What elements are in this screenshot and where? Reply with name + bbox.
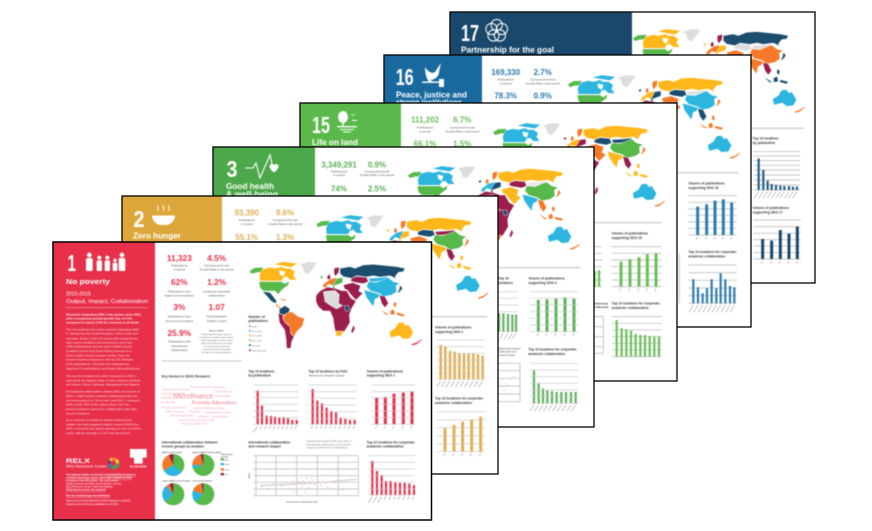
legend: income groups [221,453,232,476]
word cloud: key themes in SDG1 research: Cash Transfer [165,410,184,414]
stats: SDG 1 key numbers: Growth Rate in the period [200,268,234,272]
icon: family of people [86,253,125,271]
text block: about the analysis [66,474,136,506]
chart: top 10 locations by FWCI [308,369,357,429]
logo: Elsevier tree: ELSEVIER [130,466,147,469]
stats: SDG 1 key numbers: 4.5% [207,253,227,263]
text block: key findings: SDG 1 research was above average for four out of the [66,427,141,431]
chart: international collaboration and research impact scatter: International collaboration [248,441,290,445]
legend: number of publications: publications [248,319,268,323]
stats: SDG 1 key numbers: high-income locations [165,294,194,298]
stats: SDG 16 [491,68,560,101]
text block: key findings: income locations featured in the top 50: Ethiopia [66,358,133,362]
legend: income groups: Lower [225,469,230,471]
chart: top 10 corporate-academic collaboration SDG 15: Top 10 locations for corporate- [612,302,660,306]
word cloud: key themes in SDG1 research: Economic Growth [162,391,186,395]
icon: SDG colour wheel [109,459,118,468]
stats: SDG 15: Growth Rate in the period [445,130,480,134]
chart: top 10 locations by publication: by publication [753,141,775,145]
word cloud: key themes in SDG1 research: Poverty [190,410,201,414]
stats: SDG 1 key numbers: collaboration [171,348,188,352]
text block: about the analysis: in support of the UN's SDGs. This 2019 update [66,480,119,483]
word cloud: key themes in SDG1 research: Rural Poverty [215,389,234,393]
word cloud: key themes in SDG1 research: Rural Households [170,414,194,418]
chart: top 10 corporate-academic collaboration SDG 15 [612,302,662,357]
word cloud: key themes in SDG1 research: Poor People Development [190,385,225,389]
sheet: SDG 16 peace, justice and strong institutions [384,55,751,327]
panel: SDG 16 header: 16 [396,64,414,90]
stats: SDG 16: Compound Annual [530,78,555,82]
word cloud: key themes in SDG1 research: Rural Areas [215,394,231,398]
panel: SDG 3 header [213,147,315,427]
word cloud: key themes in SDG1 research: Households Income [163,387,189,391]
chart: top 10 locations by publication: by publication [248,374,271,378]
chart: volume of publications SDG 16 [688,182,737,240]
text block: about the analysis: Data sourced and analysed by SciVal, Elsevier's research [66,500,131,503]
text block: about the analysis: SDG Resource Centre. Data and analysis [66,486,113,489]
note: what is FWCI: an indicator of citation impact where [199,336,235,339]
chart: top 10 corporate-academic collaboration SDG 3: Top 10 locations for corporate- [528,348,577,352]
stats: SDG 3: in period [333,173,345,177]
word cloud: key themes in SDG1 research: Poverty Alleviation [192,400,237,406]
legend: number of publications: Number of [248,315,266,319]
chart: top 10 locations by publication [753,137,800,198]
stats: SDG 1 key numbers: Citation Impact [207,319,227,323]
chart: top 10 corporate-academic collaboration SDG 16 [688,250,737,312]
legend: income groups: locations [221,455,229,458]
pie charts: international collaboration between income groups: International collaboration between [162,440,218,444]
legend: number of publications: 751 to 1k [251,344,261,347]
map: SDG 17 publications [633,29,805,116]
note: what is FWCI: above 1.00 indicate the research [201,342,233,345]
pie: low income [192,483,214,505]
legend: number of publications: 101 to 250 [251,330,262,333]
chart: collaboration scatter SDG 3, partly covered: research impact [498,354,515,357]
panel: SDG 2 header: Zero hunger [133,231,181,240]
text block: key findings: while nearly 70% of the output share from low [66,403,130,407]
chart: top 10 corporate-academic collaboration SDG 15: academic collaboration [612,306,649,310]
charts: SDG 2 [431,317,487,456]
stats: SDG 1 key numbers: Compound Annual [204,264,229,268]
text block: key findings: International collaboration yielded 26% of research on [66,390,141,394]
text block: key findings: years, with an average of 1.07 over the period. [66,431,131,435]
logo: RELX SDG Resource Centre [66,458,107,469]
chart: collaboration scatter SDG 3, partly covered [497,347,521,402]
panel: SDG 17 header: Partnership for the goal [461,46,554,55]
stats: SDG 2: 1.3% [276,233,294,242]
map: SDG 1 publications [249,262,422,348]
stats: SDG 1 key numbers: Publications from [168,315,191,319]
chart: volume of publications SDG 17: Volume of publications [753,206,789,210]
text block: about the analysis: The analysis builds on Elsevier's Sustainability Science in [66,474,136,477]
word cloud: key themes in SDG1 research: Food Security Poverty Line [178,418,214,422]
chart: collaboration scatter SDG 3, partly covered: collaboration and [498,351,517,354]
stats: SDG 15: 1.5% [453,140,471,149]
stats: SDG 1 key numbers: 1.2% [207,277,227,287]
stats: SDG 15: Publications [417,125,434,129]
stats: SDG 3: Publications [331,169,348,173]
text block: about the analysis: See the methodology and definitions [66,495,111,498]
stats: SDG 1 key numbers: Field-Weighted [207,315,227,319]
chart: top 10 locations by FWCI: Top 10 locations by FIAC [308,369,348,373]
stats: SDG 1 key numbers: low-income locations [165,319,194,323]
stats: SDG 1 key numbers: collaboration [208,294,225,298]
stats: SDG 16: 2.7% [534,68,552,77]
icon: bowl with steam [152,205,175,225]
icon: interlocking rings [486,19,508,41]
logo: Elsevier tree [130,449,147,469]
pie charts: international collaboration between income groups: Upper-middle income location [193,451,222,454]
word cloud: key themes in SDG1 research: Welfare [198,414,209,418]
text block: key findings: citation, the field-weighted citation impact (FWCI) for [66,422,138,426]
text block: key findings: income locations on 7% of their total SDG 1 research, [66,398,140,402]
chart: volume of publications SDG 16: supporting SDG 16 [688,186,719,190]
stats: SDG 16: 169,330 [491,68,521,77]
note: what is FWCI: Field-weighted citation impact is [201,333,232,336]
word cloud: key themes in SDG1 research: Human Capital Aid [182,422,207,426]
panel: SDG 17 header [450,12,632,283]
chart: volume of publications SDG 15: supporting SDG 15 [612,236,642,240]
text block: key findings: 2.8M publications) two are upper-middle income [66,345,133,349]
stats: SDG 3: 74% [331,185,347,194]
logo: RELX SDG Resource Centre: RELX [66,458,91,465]
chart: volume of publications SDG 3: supporting SDG 3 [528,281,557,285]
word cloud: key themes in SDG1 research: Microfinance [173,391,213,400]
note: what is FWCI: 1.00 is the global average. Values [200,339,233,342]
text block: about the analysis: analytics tool and Scopus database as of 2019 [66,503,119,506]
pie charts: international collaboration between income groups [162,440,232,505]
panel: SDG 1 header and summary: 1 [67,250,76,276]
panel: SDG 16 header: Peace, justice and [396,90,467,99]
note: what is FWCI: average for similar publications. [201,351,232,354]
chart: top 10 locations by publication: Top 10 locations [248,369,274,373]
word cloud: key themes in SDG1 research: Key themes in SDG1 Research [162,374,210,378]
panel: SDG 1 header and summary: No poverty [66,277,111,286]
charts: SDG 17 [623,128,803,264]
text block: key findings: with a compound annual growth rate of 4.5% [65,316,133,320]
chart: top 10 locations, partly covered: locations [498,281,513,285]
icon: tree and birds [337,111,357,132]
stats: SDG 16: Growth Rate in the period [526,82,560,86]
text block: key findings: are Ghana, Kenya, Ethiopia, Bangladesh and Nigeria. [66,383,140,387]
stats: SDG 15: 111,202 [411,116,440,125]
chart: top 10 corporate-academic collaboration SDG 16: academic collaboration [688,254,725,258]
chart: top 10 locations by FWCI SDG 15, partly covered: Relationship [594,303,609,306]
panel: SDG 2 header [122,196,222,474]
text block: key findings: (133 publications), Tanzania (87 publications), [66,362,130,366]
chart: international collaboration and research impact scatter: locations; bubble size by publications [307,447,348,450]
legend: income groups: Low [225,474,229,476]
chart: volume of publications SDG 15 [612,232,662,291]
pie: high income [162,454,184,476]
legend: number of publications: 1-100 [251,326,258,328]
chart: top 10 corporate-academic collaboration SDG 3 [528,348,578,411]
text block: key findings: high income locations (accounting for more than [66,340,133,344]
stats: SDG 1 key numbers: 25.9% [168,328,192,338]
text block: key findings: The top five locations for which research on SDG 1 [66,374,137,378]
chart: top 10 locations by FWCI: *Measure by discipline location [308,374,345,378]
chart: international collaboration and research impact scatter: international collaboration for the top 50 [307,443,351,446]
stats: SDG 1 key numbers: Publications with [168,340,191,344]
stats: SDG 2: Publications [239,218,255,222]
text block: key findings: Research supporting SDG 1 has grown since 2015, [66,312,142,316]
text block: key findings: locations (China and South Africa) and one is a [66,349,131,353]
chart: top 10 corporate-academic collaboration SDG 2: Top 10 locations for corporate- [435,397,484,401]
chart: top 10 corporate-academic collaboration SDG 2 [435,397,485,456]
chart: volume of publications SDG 1: supporting SDG 1 [367,374,395,378]
stats: SDG 16: in period [500,82,512,86]
panel: SDG 2 header: 2 [134,206,144,232]
text block: key findings: compared to nearly 3.0% for research in all fields. [66,321,140,325]
panel: SDG 16 header [384,55,482,327]
word cloud: key themes in SDG1 research: Vulnerability [212,415,228,419]
text block: key findings: SDG 1. High income locations collaborated with low [66,394,138,398]
stats: SDG 1 key numbers: 3% [173,302,186,312]
stats: SDG 2: 9.6% [276,208,294,217]
stats: SDG 15 [411,116,480,149]
legend: income groups: Upper [225,464,230,466]
word cloud: key themes in SDG1 research: Gender Aid [160,400,175,404]
chart: volume of publications SDG 15: Volume of publications [612,232,648,236]
stats: SDG 1 key numbers [162,253,242,361]
word cloud: key themes in SDG1 research: Poverty Reduction [162,405,186,409]
stats: SDG 2: 93,390 [234,208,259,217]
icon: dove and gavel [422,63,444,87]
note: what is FWCI: is cited more than would be [204,345,231,348]
stats: SDG 15: Compound Annual [450,125,475,129]
stats: SDG 3: 3,349,291 [321,160,357,169]
note: what is FWCI: What is FWCI? [209,330,225,333]
panel: SDG 3 header: 3 [226,156,238,182]
text block: key findings: Uganda (74 publications) and Nepal (58 publications). [66,366,141,370]
panel: SDG 15 header: Life on land [312,138,358,147]
map: SDG 3 publications [408,166,580,253]
text block: key findings: income locations came from collaboration with high [66,407,137,411]
chart: top 10 locations corporate-academic collaboration: Top 10 locations for corporate- [367,441,415,445]
chart: top 10 locations by FWCI SDG 15, partly covered [594,247,609,353]
stats: SDG 16: 0.9% [534,92,552,101]
chart: volume of publications SDG 17: supporting SDG 17 [753,210,783,214]
legend: number of publications [248,315,268,352]
pie: lower-middle income [162,483,184,505]
stats: SDG 1 key numbers: 11,323 [167,253,192,263]
chart: top 10 locations by publication [248,369,298,433]
stats: SDG 3: Compound Annual [365,169,390,173]
stats: SDG 1 key numbers: international [171,344,188,348]
pie charts: international collaboration between income groups: Low income location [193,480,213,483]
word cloud: key themes in SDG1 research [160,374,237,426]
text block: about the analysis: a Global Landscape report, which was released in 2015 [66,477,132,480]
stats: SDG 16: 78.3% [494,92,517,101]
stats: SDG 1 key numbers: Publications [171,264,188,268]
note: what is FWCI [199,330,235,354]
pie charts: international collaboration between income groups: High income location [162,451,183,454]
panel: SDG 1 header and summary [53,242,155,520]
map: SDG 16 publications [568,75,740,162]
chart: international collaboration and research impact scatter: International collaboration (%) [286,500,317,503]
chart: volume of publications SDG 16: Volume of publications [688,182,725,186]
chart: volume of publications SDG 3: Volume of publications [528,277,565,281]
map: SDG 2 publications [316,215,488,302]
chart: top 10 locations by publication: Top 10 locations [753,137,779,141]
word cloud: key themes in SDG1 research: Inequality [160,395,173,399]
chart: top 10 locations corporate-academic collaboration [367,441,415,503]
text block: key findings: The US produces the most research supporting SDG [66,327,140,331]
stats: SDG 15: 6.7% [453,116,471,125]
stats: SDG 2 [234,208,302,242]
charts: SDG 15 [594,223,662,357]
text block: about the analysis: further develops the SDG search queries, see the [66,483,122,486]
stats: SDG 2: 55.1% [235,233,258,242]
legend: income groups: Collaborating [221,453,232,456]
sheet: SDG 17 partnership for the goal [450,12,815,283]
chart: international collaboration and research impact scatter: Relationship between FWCI and share of [307,440,352,443]
charts: SDG 16 [677,173,738,312]
text block: key findings: 1, followed by the United Kingdom, China, India and [66,332,138,336]
sheet: SDG 1 no poverty [53,242,432,520]
chart: volume of publications SDG 1 [367,369,415,429]
legend: income groups: High [225,459,228,461]
panel: SDG 3 header: Good health [226,182,274,191]
stats: SDG 1 key numbers: 62% [171,277,188,287]
chart: top 10 corporate-academic collaboration SDG 16: Top 10 locations for corporate- [688,250,737,254]
text block: key findings [65,312,142,435]
text block: key findings: As a measure of academic impact measured by [66,418,132,422]
pie charts: international collaboration between income groups: Lower-middle income location [162,480,191,483]
legend: number of publications: Fewer than 100 [251,349,267,352]
sheet: SDG 3 good health and well-being [213,147,594,427]
sheet: SDG 15 life on land [300,103,677,381]
chart: volume of publications SDG 2: supporting SDG 2 [435,330,463,334]
chart: volume of publications SDG 17 [753,206,801,264]
panel: SDG 17 header: 17 [461,20,479,46]
chart: top 10 locations by FWCI SDG 15, partly covered: collaboration [594,306,609,309]
stats: SDG 16: Publications [498,78,514,82]
chart: top 10 corporate-academic collaboration SDG 3: academic collaboration [528,352,565,356]
panel: SDG 15 header [300,103,401,381]
pie charts: international collaboration between income groups: income groups by location [162,444,204,448]
panel: SDG 15 header: 15 [312,112,330,138]
chart: volume of publications SDG 3 [528,277,578,336]
text block: about the analysis: Click here to access the research [66,489,106,492]
chart: international collaboration and research impact scatter: FWCI [249,472,251,478]
text block: key findings: Australia. Seven of the 10 most prolific locations are [66,336,138,340]
stats: SDG 15: 66.1% [414,140,436,149]
pie: upper-middle income [192,454,214,476]
chart: top 10 corporate-academic collaboration SDG 2: academic collaboration [435,401,472,405]
stats: SDG 1 key numbers: Publications from [168,290,191,294]
stats: SDG 1 key numbers: Academic-corporate [203,290,230,294]
panel: SDG 1 header and summary: 2015-2019 [66,292,91,298]
stats: SDG 3: Growth Rate in the period [360,173,394,177]
legend: number of publications: 251 to 500 [251,335,262,338]
text block: key findings: income locations. [66,411,90,415]
stats: SDG 3: 2.5% [368,185,386,194]
chart: volume of publications SDG 2: Volume of publications [435,326,472,330]
chart: international collaboration and research impact scatter: and research impact [248,445,282,449]
chart: volume of publications SDG 2 [435,326,485,387]
text block: key findings: lower-middle income location (India). Four low [66,353,130,357]
stats: SDG 15: in period [419,130,431,134]
stats: SDG 2: Growth Rate in the period [268,222,302,226]
chart: collaboration scatter SDG 3, partly covered: Relationship between [498,347,521,350]
stats: SDG 1 key numbers: in period [174,268,185,272]
panel: SDG 1 header and summary: Output, Impact, Collaboration [66,299,148,305]
logo: RELX SDG Resource Centre: SDG Resource Centre [66,465,107,469]
charts: SDG 3 [495,268,580,411]
note: what is FWCI: expected based on the global [203,348,231,351]
word cloud: key themes in SDG1 research: Sustainable Income [205,410,232,414]
panel: SDG 3 header: & well-being [226,190,278,199]
word cloud: key themes in SDG1 research: Social Protection Policy [193,406,225,410]
sheet: SDG 2 zero hunger [122,196,498,474]
panel: SDG 16 header: strong institutions [396,98,463,107]
stats: SDG 3 [321,160,394,194]
legend: number of publications: 501 to 750 [251,339,262,342]
stats: SDG 3: 0.9% [368,160,386,169]
icon: heartbeat line and heart [245,155,279,178]
chart: top 10 locations, partly covered [495,277,518,339]
chart: top 10 locations, partly covered: Top 10 [498,277,509,281]
chart: international collaboration and research impact scatter [248,440,358,503]
stats: SDG 1 key numbers: 1.07 [209,302,225,312]
stats: SDG 2: Compound Annual [273,218,298,222]
chart: top 10 locations corporate-academic collaboration: academic collaboration [367,445,404,449]
chart: volume of publications SDG 1: Volume of publications [367,369,403,373]
text block: key findings: represents the largest share of their research portfolio [66,378,141,382]
stats: SDG 2: in period [241,222,253,226]
map: SDG 15 publications [493,123,665,210]
